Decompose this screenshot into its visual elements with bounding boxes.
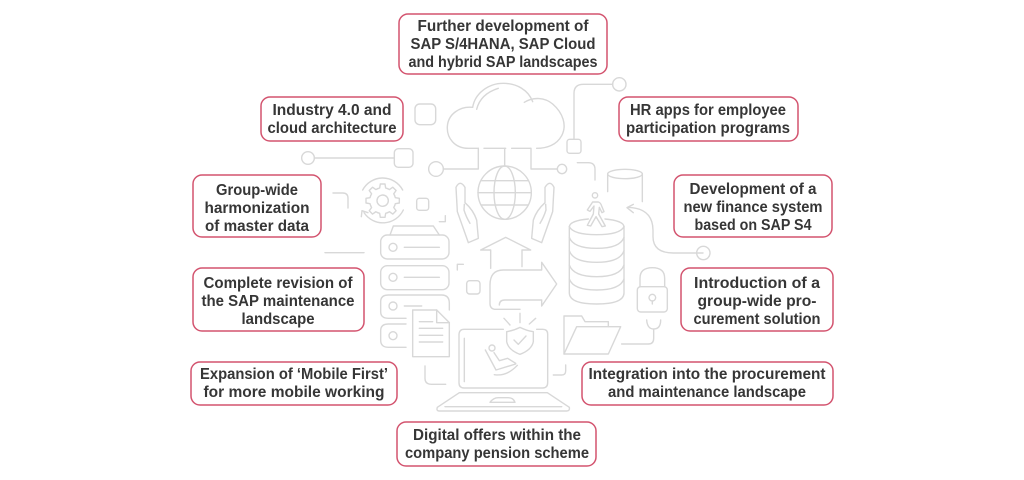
- icon: gear with circular arrows: [361, 178, 403, 223]
- label: finance system: based on SAP S4: [694, 217, 812, 234]
- corner accent: left of laptop: [425, 366, 446, 384]
- connector: cloud to right node: [531, 148, 567, 174]
- label: master data: Group-wide: [216, 182, 298, 199]
- icon: shield with check: [507, 327, 533, 354]
- line art: upper section: [302, 78, 710, 260]
- corner accent: small: [439, 216, 445, 222]
- label: finance system: Development of a: [690, 181, 817, 198]
- node: square by arrow: [467, 281, 480, 294]
- label: further development: SAP S/4HANA, SAP Cloud: [410, 36, 596, 53]
- label: finance system: [674, 175, 832, 237]
- node: upper right connector: [567, 78, 626, 153]
- icon: right hand: [532, 183, 554, 243]
- label: master data: [193, 175, 321, 237]
- corner accent: beside gear: [333, 193, 348, 208]
- label: procurement solution: group-wide pro-: [698, 293, 816, 310]
- label: master data: of master data: [205, 218, 309, 235]
- label: integration: Integration into the procurement: [588, 366, 826, 383]
- label: mobile first: for more mobile working: [204, 384, 384, 401]
- icon: server stack: [381, 226, 449, 347]
- icon: globe: [478, 166, 531, 219]
- label: procurement solution: [681, 268, 833, 331]
- label: pension scheme: company pension scheme: [405, 445, 589, 462]
- label: pension scheme: Digital offers within the: [413, 427, 581, 444]
- label: maintenance landscape: Complete revision of: [204, 275, 353, 292]
- arrow: curved to database cylinder: [627, 204, 710, 260]
- label: mobile first: Expansion of ‘Mobile First’: [200, 366, 388, 383]
- label: further development: and hybrid SAP landscapes: [408, 54, 598, 71]
- icon: padlock: [637, 268, 667, 312]
- node: small square: [417, 198, 429, 210]
- icon: cloud: [447, 83, 564, 148]
- corner accent: [577, 163, 595, 180]
- label: maintenance landscape: landscape: [242, 311, 315, 328]
- icon: walking person: [587, 193, 605, 227]
- connector stub left of servers: [325, 251, 364, 255]
- label: further development: Further development of: [418, 18, 589, 35]
- icon: shield rays: [504, 313, 536, 325]
- label: industry 4.0: [261, 97, 403, 141]
- label: maintenance landscape: [193, 268, 364, 331]
- icon: cylinder: [608, 169, 642, 202]
- icon: person in rocking chair: [485, 345, 517, 375]
- connector: cloud to left node: [429, 148, 478, 176]
- label: integration: and maintenance landscape: [608, 384, 806, 401]
- corner accent: small: [457, 264, 463, 270]
- label: industry 4.0: Industry 4.0 and: [272, 102, 392, 119]
- arrow: up: [481, 237, 531, 268]
- label: pension scheme: [397, 422, 596, 466]
- connector: cloud to globe: [503, 148, 507, 166]
- label: maintenance landscape: the SAP maintenance: [202, 293, 355, 310]
- icon: left hand: [456, 183, 478, 243]
- label: mobile first: [191, 362, 397, 405]
- arrow: right: [490, 262, 557, 309]
- label: HR apps: [619, 97, 798, 141]
- label: HR apps: participation programs: [626, 120, 790, 137]
- icon: laptop: [437, 329, 569, 411]
- icon: document: [413, 310, 449, 357]
- line art: lower section: [325, 219, 667, 411]
- icon: folder: [564, 316, 621, 354]
- node: left connector: [302, 149, 413, 167]
- label: master data: harmonization: [204, 200, 310, 217]
- label: integration: [582, 362, 833, 405]
- label: further development: [399, 14, 607, 74]
- label: industry 4.0: cloud architecture: [268, 120, 397, 137]
- icon: database stack: [569, 219, 624, 304]
- corner accent: right of laptop: [553, 365, 566, 375]
- node: square near cloud: [415, 104, 436, 125]
- label: finance system: new finance system: [684, 199, 822, 216]
- label: procurement solution: Introduction of a: [694, 275, 820, 292]
- label: HR apps: HR apps for employee: [630, 102, 786, 119]
- label: procurement solution: curement solution: [694, 311, 820, 328]
- connector: padlock to folder: [622, 320, 661, 344]
